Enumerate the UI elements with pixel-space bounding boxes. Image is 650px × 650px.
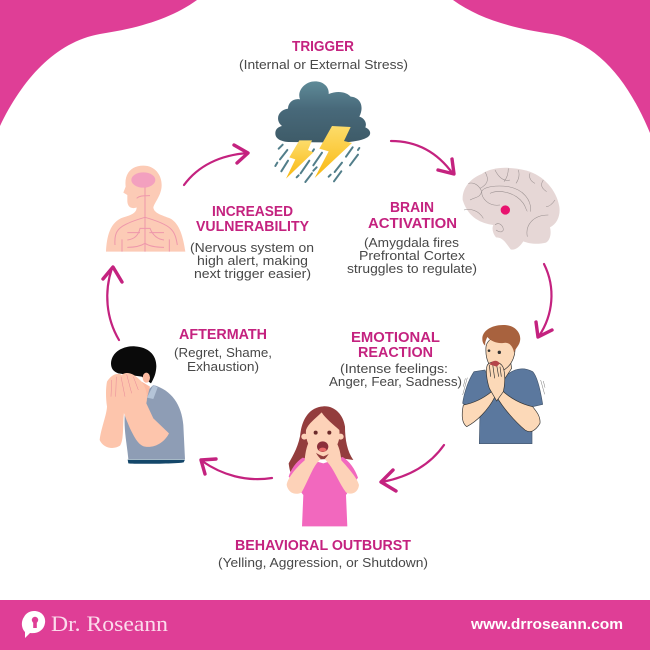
label: emotional reaction: (Intense feelings: [340,361,448,376]
logo wordmark: Dr. Roseann [51,611,168,636]
icon: anxious man [462,325,545,444]
label: emotional reaction: Anger, Fear, Sadness) [329,374,462,389]
label: increased vulnerability: next trigger easier) [194,266,311,281]
left arm and hand [287,439,321,494]
footer bar [0,600,650,650]
label: increased vulnerability: high alert, making [197,253,308,268]
top left pink corner [0,0,197,126]
label: aftermath [174,327,272,374]
brain folds [464,168,555,237]
arrow: vulnerability to trigger [184,145,248,185]
ear and neck [143,373,150,383]
shirt [289,457,358,526]
hands [486,362,505,401]
fingers [111,374,138,397]
icon: shouting woman [287,406,359,526]
label: increased vulnerability [190,204,314,281]
waistband [128,460,185,464]
nerves [115,187,177,252]
website: www.drroseann.com [470,617,623,633]
neck and head [489,358,512,378]
label: behavioral outburst [218,538,428,570]
label: emotional reaction: REACTION [358,345,433,361]
mouth [317,441,328,452]
arrow: brain to reaction [536,264,552,337]
arrow: reaction to outburst [381,445,444,491]
label: brain activation: BRAIN [390,200,434,216]
label: increased vulnerability: VULNERABILITY [196,219,309,235]
label: emotional reaction: EMOTIONAL [351,330,440,346]
label: brain activation [347,200,477,276]
arms [462,392,495,427]
label: aftermath: AFTERMATH [179,327,267,343]
label: behavioral outburst: BEHAVIORAL OUTBURST [235,538,411,554]
label: brain activation: (Amygdala fires [364,235,459,250]
label: increased vulnerability: (Nervous system on [190,240,314,255]
lightning large [315,126,352,178]
icon: storm cloud [275,81,370,182]
arrow: aftermath to vulnerability [103,267,122,340]
arrow: outburst to aftermath [201,459,272,479]
hair [482,325,520,352]
shirt [125,385,185,459]
logo icon [22,611,45,638]
label: behavioral outburst: (Yelling, Aggression, or Shutdown) [218,555,428,570]
right arm and hand [325,439,359,494]
hair [289,406,353,475]
label: brain activation: struggles to regulate) [347,261,477,276]
label: aftermath: Exhaustion) [187,359,259,374]
arrow: trigger to brain [391,141,454,174]
label: aftermath: (Regret, Shame, [174,345,272,360]
lightning small [286,140,313,179]
label: emotional reaction [329,330,462,389]
icon: brain [463,168,560,250]
brain [131,172,155,188]
label: brain activation: ACTIVATION [368,216,457,232]
icon: man covering face [100,346,185,464]
far hand and arm [100,374,125,448]
amygdala dot [501,205,510,215]
shake lines [463,378,545,395]
label: trigger: (Internal or External Stress) [239,57,408,72]
label: increased vulnerability: INCREASED [212,204,293,220]
face [306,412,340,456]
near hand and arm [120,373,169,447]
rain drops [275,145,359,182]
label: brain activation: Prefrontal Cortex [359,248,465,263]
shirt [463,369,543,444]
label: trigger [239,39,408,72]
icon: nervous system body [106,166,185,252]
hair [111,346,156,383]
top right pink corner [453,0,650,133]
label: trigger: TRIGGER [292,39,354,55]
